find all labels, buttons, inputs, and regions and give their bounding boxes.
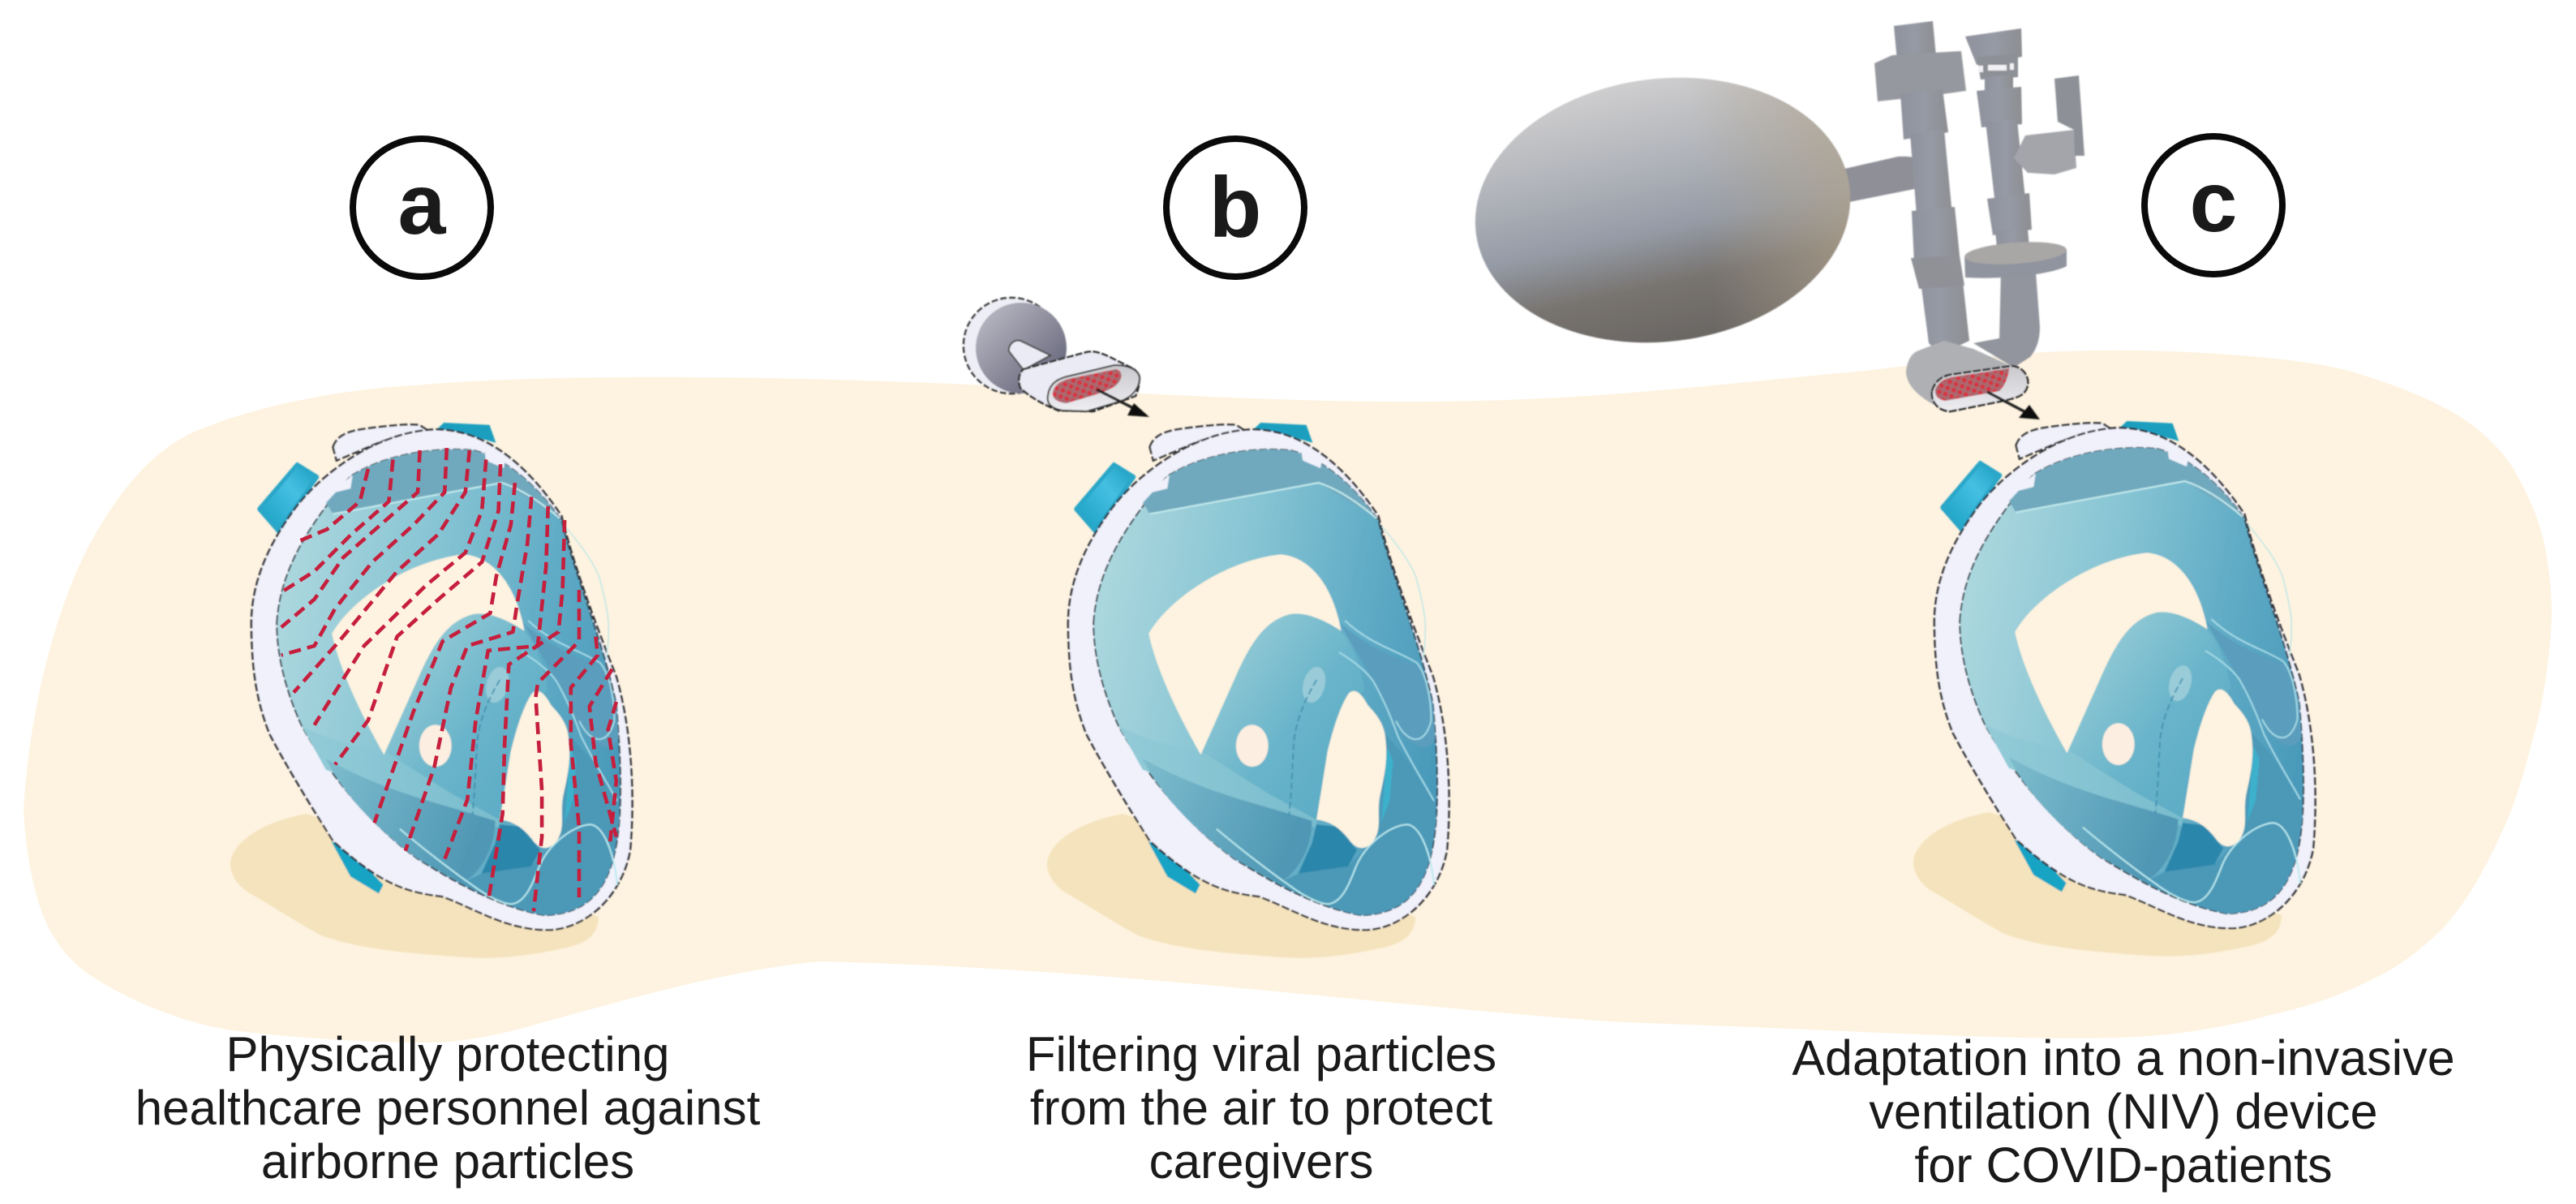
light lower band (1118, 725, 1319, 828)
caption a (135, 1027, 761, 1189)
caption c: for COVID-patients (1914, 1137, 2333, 1193)
letter badge b (1166, 139, 1304, 277)
lower right panel (1278, 734, 1436, 915)
caption a: healthcare personnel against (135, 1081, 761, 1135)
caption c (1792, 1030, 2455, 1193)
valve (2014, 75, 2084, 174)
top tab (1254, 423, 1312, 443)
caption b: caregivers (1149, 1134, 1373, 1189)
vent oval (1299, 662, 1330, 707)
caption b: from the air to protect (1030, 1081, 1492, 1135)
speaking hole (1236, 725, 1269, 767)
letter badge c (2145, 136, 2282, 274)
frame notches (1140, 450, 1322, 501)
small filter attached to mask b (964, 298, 1149, 417)
left tube (1874, 21, 1969, 355)
mask c: mask used as NIV device (1913, 421, 2316, 957)
letter badge c: c (2190, 154, 2237, 250)
side knob (1075, 465, 1134, 531)
resuscitator bag and valve assembly (1460, 21, 2084, 419)
caption b: Filtering viral particles (1026, 1027, 1496, 1081)
top strap (1150, 424, 1247, 461)
right panel lines (1339, 621, 1434, 801)
mask a base (230, 423, 633, 958)
cyan stripe (1381, 747, 1393, 823)
dark chin vent (1299, 824, 1357, 874)
outer frame (1068, 429, 1449, 930)
caption c: ventilation (NIV) device (1869, 1084, 2378, 1139)
filter housing (1019, 351, 1139, 411)
mask b: plain full-face mask (1047, 423, 1449, 958)
nose dashed seam (1289, 680, 1316, 815)
filter disk (964, 298, 1067, 393)
disc valve (1964, 239, 2067, 278)
arrow (1987, 392, 2040, 419)
letter badge a (353, 139, 491, 277)
arrow (1097, 389, 1149, 417)
shield thin line (1382, 527, 1425, 659)
bag connector arm (1841, 157, 1930, 202)
mask a: mask with red dashed protection lines (230, 423, 633, 958)
U-shaped return tube (1973, 272, 2040, 368)
letter badge a: a (398, 157, 447, 252)
upper cut-out (1148, 554, 1342, 755)
right side panel (1340, 623, 1436, 747)
upper band (1143, 449, 1376, 518)
filter mesh opening (1048, 365, 1140, 411)
chin outline (1217, 824, 1434, 904)
background cream blob (24, 350, 2552, 1043)
connector stem (1009, 341, 1050, 370)
red dashed lines (281, 448, 616, 911)
lower dark lens (1143, 759, 1312, 884)
caption b (1026, 1027, 1496, 1189)
lower cut-out (1316, 691, 1386, 848)
right tube (1965, 28, 2032, 247)
bag (1460, 57, 1865, 363)
nose cup (1203, 613, 1364, 819)
ground shadow (1047, 814, 1415, 958)
bottom tab (1148, 842, 1200, 893)
filter adapter (1906, 341, 2028, 411)
caption c: Adaptation into a non-invasive (1792, 1030, 2455, 1086)
visor (1093, 449, 1437, 915)
caption a: airborne particles (261, 1134, 634, 1189)
letter badge b: b (1209, 160, 1261, 256)
caption a: Physically protecting (226, 1027, 669, 1081)
